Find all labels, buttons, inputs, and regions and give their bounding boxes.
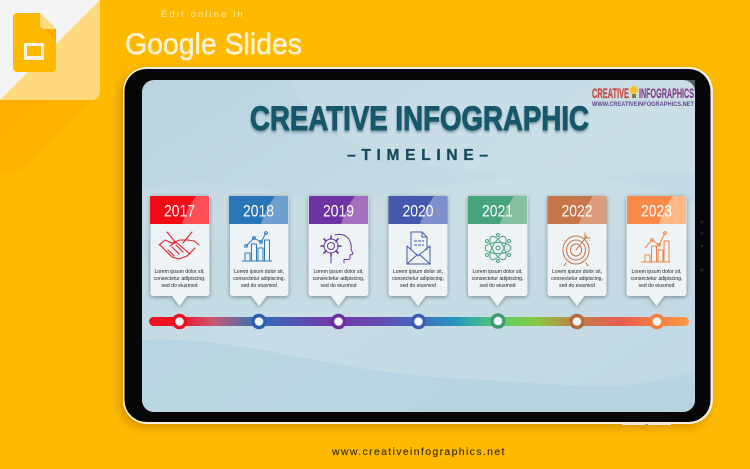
card: 2023: [626, 196, 686, 306]
card: 2018: sed do eiusmod: [241, 283, 277, 289]
card: 2023: 2023: [641, 202, 672, 220]
card: 2019: [308, 196, 368, 306]
card: 2020: consectetur adipiscing,: [392, 276, 444, 282]
card: 2021: consectetur adipiscing,: [472, 276, 523, 282]
card: 2022: Lorem ipsum dolor sit,: [552, 269, 602, 275]
card: 2017: sed do eiusmod: [162, 283, 198, 289]
timeline bar: [149, 315, 689, 328]
subtitle: –TIMELINE–: [347, 147, 488, 164]
card: 2022: sed do eiusmod: [559, 283, 595, 289]
card: 2021: sed do eiusmod: [480, 283, 516, 289]
icon: slides document: [13, 13, 56, 72]
card: 2021: 2021: [482, 202, 513, 220]
icon: growth chart: [641, 232, 670, 262]
icon: handshake: [159, 232, 199, 259]
heading: Google Slides: Google Slides: [125, 28, 302, 61]
icon: head with gear: [321, 234, 353, 263]
card: 2019: 2019: [323, 202, 354, 220]
card: 2020: Lorem ipsum dolor sit,: [393, 269, 443, 275]
card: 2023: Lorem ipsum dolor sit,: [631, 269, 682, 275]
card: 2023: consectetur adipiscing,: [631, 276, 682, 282]
card: 2017: 2017: [164, 202, 195, 220]
icon: atom: [485, 234, 511, 262]
card: 2019: sed do eiusmod: [321, 283, 357, 289]
logo: Creative Infographics: CREATIVE: [592, 85, 629, 101]
icon: target with arrow: [563, 233, 590, 266]
logo: Creative Infographics: [592, 85, 694, 108]
card: 2020: [388, 196, 448, 306]
card: 2018: consectetur adipiscing,: [233, 276, 285, 282]
card: 2021: [468, 196, 528, 306]
card: 2020: sed do eiusmod: [400, 283, 436, 289]
corner badge: Google Slides: [0, 0, 100, 172]
card: 2019: Lorem ipsum dolor sit,: [313, 269, 364, 275]
logo: Creative Infographics: WWW.CREATIVEINFOGRAPHICS.NET: [592, 102, 694, 108]
card: 2018: Lorem ipsum dolor sit,: [234, 269, 284, 275]
card: 2019: consectetur adipiscing,: [313, 276, 364, 282]
slide screen: [142, 80, 695, 412]
logo: Creative Infographics: INFOGRAPHICS: [639, 85, 694, 101]
card: 2022: consectetur adipiscing,: [551, 276, 603, 282]
card: 2021: Lorem ipsum dolor sit,: [472, 269, 523, 275]
card: 2022: 2022: [562, 202, 592, 220]
card: 2018: 2018: [243, 202, 274, 220]
card: 2023: sed do eiusmod: [639, 283, 675, 289]
card: 2018: [229, 196, 288, 306]
icon: bar chart: [242, 232, 272, 261]
icon: envelope with letter: [407, 232, 430, 264]
caption: edit online in: Edit online in: [161, 9, 245, 20]
card: 2017: consectetur adipiscing,: [154, 276, 205, 282]
card: 2020: 2020: [402, 202, 434, 220]
footer url: www.creativeinfographics.net: [331, 446, 506, 458]
card: 2022: [547, 196, 606, 306]
card: 2017: Lorem ipsum dolor sit,: [154, 269, 205, 275]
tablet: [123, 67, 713, 425]
card: 2017: [150, 196, 210, 306]
title: CREATIVE INFOGRAPHIC: [250, 100, 589, 138]
